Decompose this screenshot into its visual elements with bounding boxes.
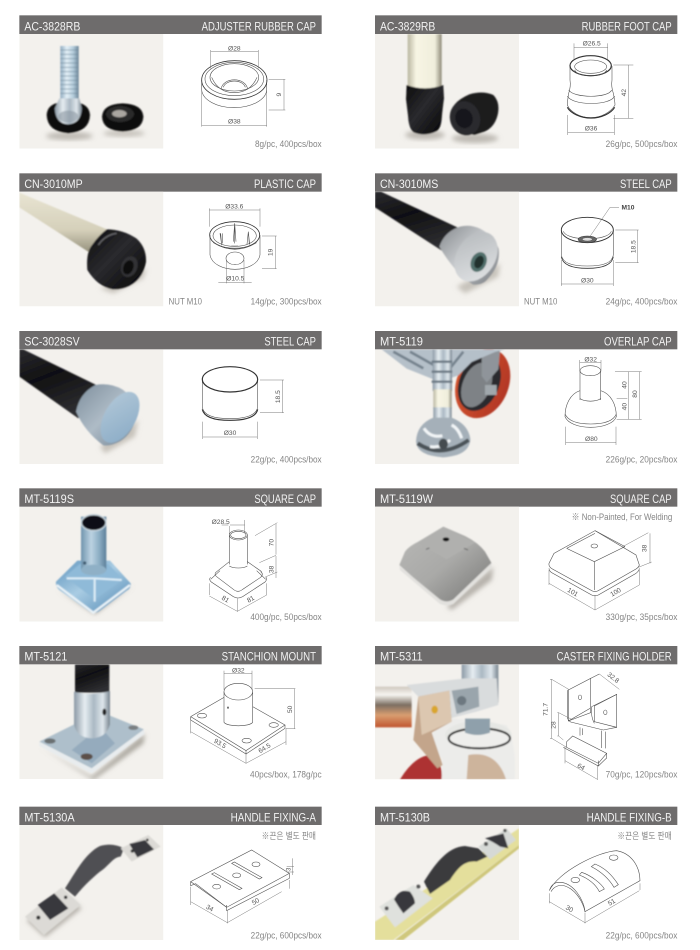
- photo: tube in rubber foot and loose foot: [375, 34, 519, 148]
- spec: CN-3010MS weight and packing: 24g/pc, 400pcs/box: [606, 296, 678, 306]
- header bar: MT-5130B: [375, 807, 677, 825]
- line drawing: caster fixing holder: 71.7: [542, 703, 549, 716]
- line drawing: square cap for welding: 101: [566, 587, 579, 599]
- header bar: MT-5311: [375, 646, 677, 664]
- note: NUT M10: NUT M10: [524, 296, 557, 306]
- spec: MT-5119S weight and packing: 400g/pc, 50pcs/box: [250, 612, 322, 622]
- spec: MT-5130B weight and packing: 22g/pc, 600pcs/box: [606, 930, 678, 940]
- header bar: MT-5121: STANCHION MOUNT: [222, 650, 317, 664]
- panel: MT-5121 stanchion mount: [19, 646, 322, 780]
- photo: caster holder on chrome frame: [375, 664, 519, 780]
- line drawing: square cap with socket: [209, 519, 277, 612]
- line drawing: handle fixing A: 3: [287, 867, 293, 871]
- header bar: MT-5130A: HANDLE FIXING-A: [231, 810, 316, 824]
- line drawing: square cap with socket: 81: [220, 595, 230, 605]
- header bar: MT-5119: OVERLAP CAP: [604, 335, 672, 349]
- spec: SC-3028SV weight and packing: 22g/pc, 400pcs/box: [251, 455, 322, 465]
- line drawing: plastic cap: 19: [268, 248, 275, 256]
- photo: curved handle fixing on yellow tube: [375, 825, 519, 940]
- panel: CN-3010MP plastic cap: [19, 173, 322, 306]
- header bar: MT-5119S: SQUARE CAP: [254, 492, 316, 506]
- note: NUT M10: NUT M10: [169, 296, 202, 306]
- header bar: MT-5130B: MT-5130B: [380, 810, 430, 824]
- header bar: SC-3028SV: [19, 331, 322, 349]
- line drawing: rubber foot cap: [567, 40, 633, 135]
- spec: AC-3828RB weight and packing: 8g/pc, 400pcs/box: [255, 139, 322, 149]
- header bar: SC-3028SV: STEEL CAP: [264, 335, 316, 349]
- line drawing: rubber foot cap: 42: [621, 89, 628, 96]
- line drawing: overlap cap: 40: [621, 403, 628, 410]
- panel: MT-5119S square cap: [19, 488, 322, 622]
- line drawing: steel cap with M10: [561, 204, 639, 286]
- line drawing: steel cap: 18.5: [275, 390, 282, 403]
- header bar: CN-3010MP: PLASTIC CAP: [254, 177, 316, 191]
- photo: square base with blue steel socket: [20, 507, 163, 622]
- header bar: MT-5119: MT-5119: [380, 335, 423, 349]
- line drawing: steel cap: Ø30: [224, 430, 237, 437]
- line drawing: stanchion mount: [191, 667, 295, 763]
- line drawing: adjuster rubber cap: 9: [276, 93, 283, 97]
- panel: MT-5119 overlap cap: [375, 331, 678, 465]
- photo: cream tube with black plastic cap: [19, 192, 164, 306]
- header bar: AC-3828RB: [19, 15, 322, 34]
- header bar: MT-5119: [375, 331, 677, 349]
- line drawing: overlap cap: Ø32: [584, 356, 597, 363]
- panel: AC-3829RB rubber foot cap: [375, 15, 678, 149]
- line drawing: overlap cap: 80: [632, 390, 639, 398]
- photo: adjuster bolt and rubber cap: [20, 34, 163, 148]
- header bar: MT-5121: [19, 646, 322, 664]
- line drawing: caster fixing holder: 28: [550, 721, 557, 729]
- header bar: AC-3828RB: AC-3828RB: [24, 19, 80, 33]
- note: strap sold separately: ※끈은 별도 판매: [617, 831, 672, 841]
- header bar: CN-3010MS: CN-3010MS: [380, 177, 438, 191]
- line drawing: square cap for welding: 38: [642, 544, 649, 552]
- line drawing: plastic cap: Ø33.6: [225, 204, 244, 211]
- header bar: MT-5119W: MT-5119W: [380, 492, 434, 506]
- header bar: MT-5119W: [375, 488, 677, 507]
- spec: MT-5119 weight and packing: 226g/pc, 20pcs/box: [606, 455, 678, 465]
- header bar: SC-3028SV: SC-3028SV: [24, 335, 80, 349]
- panel: CN-3010MS steel cap: [375, 173, 678, 306]
- panel: AC-3828RB adjuster rubber cap: [19, 15, 322, 149]
- photo: flat handle fixing with black strap: [20, 825, 163, 940]
- panel: MT-5311 caster fixing holder: [375, 646, 678, 780]
- spec: MT-5121 packing and weight: 40pcs/box, 178g/pc: [250, 770, 322, 780]
- line drawing: steel cap with M10: Ø30: [581, 277, 594, 284]
- panel: MT-5130B handle fixing B: [375, 807, 678, 940]
- line drawing: adjuster rubber cap: Ø38: [228, 118, 241, 125]
- photo: black tube with steel cap: [19, 350, 163, 464]
- line drawing: caster fixing holder: 64: [576, 762, 586, 772]
- photo: black tube with threaded steel cap: [375, 192, 519, 306]
- line drawing: steel cap with M10: M10: [622, 204, 635, 211]
- line drawing: overlap cap: [565, 356, 642, 445]
- line drawing: caster fixing holder: 32.8: [606, 671, 620, 685]
- header bar: MT-5119S: [19, 488, 322, 507]
- header bar: MT-5119S: MT-5119S: [24, 492, 74, 506]
- header bar: CN-3010MS: [375, 173, 677, 192]
- photo: grey welded square cap: [375, 506, 519, 622]
- header bar: MT-5119W: SQUARE CAP: [610, 492, 672, 506]
- line drawing: square cap for welding: 100: [609, 587, 623, 599]
- spec: CN-3010MP weight and packing: 14g/pc, 300pcs/box: [251, 296, 322, 306]
- header bar: AC-3829RB: RUBBER FOOT CAP: [582, 19, 672, 33]
- line drawing: steel cap: [202, 367, 284, 439]
- header bar: MT-5121: MT-5121: [24, 650, 68, 664]
- header bar: MT-5130B: HANDLE FIXING-B: [587, 810, 672, 824]
- note: strap sold separately: ※끈은 별도 판매: [262, 831, 316, 841]
- line drawing: stanchion mount: 50: [287, 705, 294, 713]
- header bar: MT-5311: MT-5311: [380, 650, 423, 664]
- spec: MT-5119W weight and packing: 330g/pc, 35pcs/box: [606, 612, 678, 622]
- line drawing: caster fixing holder: [542, 671, 620, 780]
- header bar: AC-3828RB: ADJUSTER RUBBER CAP: [202, 19, 316, 33]
- line drawing: square cap with socket: Ø28.5: [212, 519, 230, 526]
- line drawing: adjuster rubber cap: Ø28: [228, 46, 241, 53]
- line drawing: handle fixing B: 30: [564, 904, 574, 914]
- panel: MT-5119W square cap: [375, 488, 678, 622]
- line drawing: overlap cap: 40: [621, 381, 628, 389]
- line drawing: square cap with socket: 70: [268, 539, 275, 546]
- line drawing: handle fixing A: 34: [204, 904, 215, 914]
- header bar: AC-3829RB: [375, 15, 677, 34]
- note: non-painted, for welding: ※ Non-Painted, For Welding: [572, 512, 672, 522]
- line drawing: handle fixing A: 50: [251, 897, 261, 907]
- header bar: CN-3010MP: [19, 173, 322, 192]
- header bar: CN-3010MP: CN-3010MP: [24, 177, 83, 191]
- header bar: MT-5130A: [19, 807, 322, 825]
- header bar: AC-3829RB: AC-3829RB: [380, 19, 435, 33]
- spec: MT-5130A weight and packing: 22g/pc, 600pcs/box: [251, 930, 322, 940]
- spec: AC-3829RB weight and packing: 26g/pc, 500pcs/box: [606, 139, 678, 149]
- line drawing: plastic cap: [209, 204, 277, 283]
- line drawing: adjuster rubber cap: [202, 46, 285, 127]
- line drawing: handle fixing B: [549, 851, 640, 923]
- photo: stanchion mount on square plate: [20, 664, 163, 779]
- photo: caster wheel and overlap cap foot: [375, 349, 519, 464]
- line drawing: square cap with socket: 38: [268, 565, 275, 573]
- panel: MT-5130A handle fixing A: [19, 807, 322, 940]
- line drawing: stanchion mount: 93.5: [212, 738, 227, 750]
- line drawing: plastic cap: Ø10.5: [226, 276, 245, 283]
- header bar: CN-3010MS: STEEL CAP: [620, 177, 672, 191]
- line drawing: stanchion mount: 64.5: [258, 742, 272, 755]
- spec: MT-5311 weight and packing: 70g/pc, 120pcs/box: [606, 770, 678, 780]
- line drawing: rubber foot cap: Ø36: [585, 126, 598, 133]
- header bar: MT-5130A: MT-5130A: [24, 810, 75, 824]
- line drawing: handle fixing A: [191, 850, 294, 923]
- line drawing: stanchion mount: Ø32: [232, 667, 245, 674]
- header bar: MT-5311: CASTER FIXING HOLDER: [557, 650, 672, 664]
- line drawing: square cap with socket: 81: [246, 595, 256, 605]
- line drawing: steel cap with M10: 18.5: [630, 240, 637, 253]
- line drawing: handle fixing B: 51: [607, 898, 617, 908]
- line drawing: rubber foot cap: Ø26.5: [583, 40, 601, 47]
- line drawing: overlap cap: Ø80: [585, 436, 598, 443]
- line drawing: square cap for welding: [549, 531, 652, 610]
- panel: SC-3028SV steel cap: [19, 331, 322, 465]
